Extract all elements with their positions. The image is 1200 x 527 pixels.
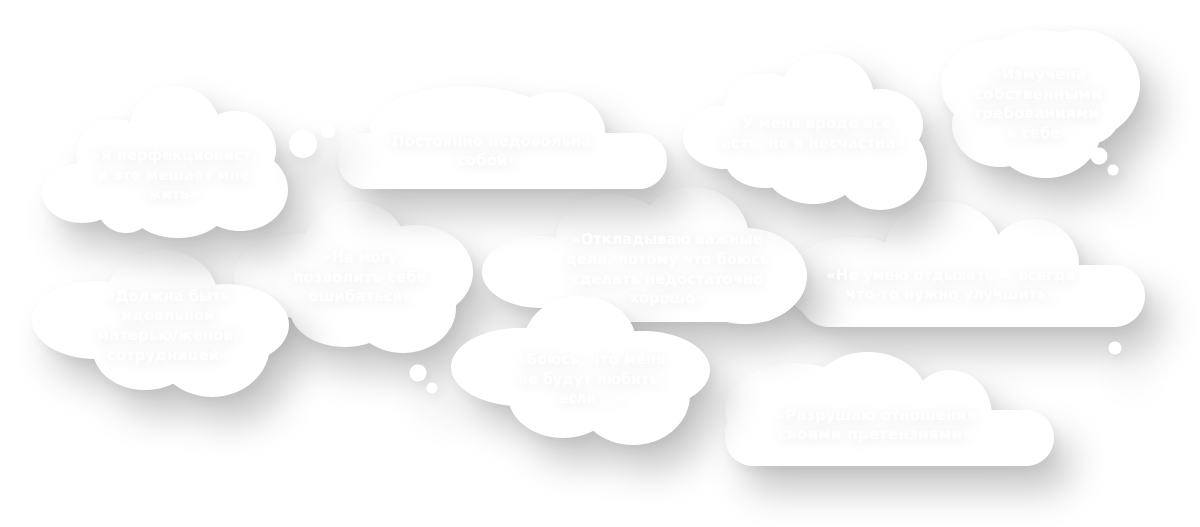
cloud: exhausted: [941, 30, 1140, 178]
text: dissatisfied: [382, 132, 592, 169]
cloud: cannot allow myself mistakes: [234, 201, 473, 353]
text: cannot allow mistakes: «Не могу: [322, 248, 398, 266]
text: afraid: если ...»: [560, 389, 624, 407]
cloud: putting off important things: [482, 187, 807, 324]
cloud: perfectionist: [42, 86, 288, 238]
text: ruin relationships: «Разрушаю отношения: [776, 406, 976, 424]
text: putting off: «Откладываю важные: [572, 230, 762, 248]
text: dissatisfied: «Постоянно недовольна: [382, 132, 592, 150]
thought bubble: rest cloud: [1108, 342, 1122, 354]
text: must be ideal: матерью/женой/: [97, 326, 240, 344]
cloud: must be ideal: [32, 250, 289, 397]
text: dissatisfied: собой»: [457, 151, 517, 169]
text: exhausted: собственными: [974, 85, 1102, 103]
text: unhappy: [721, 114, 905, 152]
text: afraid: «Боюсь, что меня: [516, 350, 666, 368]
text: exhausted: [973, 65, 1102, 142]
text: ruin relationships: [776, 406, 976, 443]
text: unhappy: есть, но я несчастна»: [721, 134, 905, 152]
text: cannot rest: что-то нужно улучшить»: [846, 285, 1056, 303]
text: putting off: [565, 230, 769, 307]
text: cannot allow mistakes: [293, 248, 427, 305]
text: perfectionist: [91, 146, 257, 203]
cloud: constantly dissatisfied: [338, 86, 667, 189]
text: must be ideal: [97, 287, 240, 364]
text: perfectionist: и это мешает мне: [98, 166, 250, 184]
thought bubbles: perfectionist cloud: [289, 124, 335, 158]
thought bubbles: mistakes cloud: [410, 364, 438, 394]
text: afraid: [516, 350, 666, 407]
cloud: cannot rest: [785, 201, 1145, 327]
text: afraid: не будут любить,: [518, 370, 664, 388]
text: cannot allow mistakes: ошибаться»: [308, 287, 412, 305]
text: ruin relationships: своими претензиями»: [778, 425, 972, 443]
text: putting off: дела, потому что боюсь: [565, 250, 769, 268]
text: unhappy: «У меня вроде всё: [732, 114, 892, 132]
text: perfectionist: жить»: [148, 185, 198, 203]
text: perfectionist: «Я перфекционист,: [91, 146, 257, 164]
text: cannot rest: [826, 266, 1076, 303]
text: must be ideal: «Должна быть: [106, 287, 230, 305]
thought bubbles: exhausted cloud: [1090, 148, 1118, 176]
text: cannot allow mistakes: позволить себе: [293, 268, 427, 286]
cloud: unhappy: [683, 53, 927, 210]
text: cannot rest: «Не умею отдыхать — всегда: [826, 266, 1076, 284]
text: exhausted: к себе»: [1007, 124, 1069, 142]
text: putting off: сделать недостаточно: [571, 270, 763, 288]
text: must be ideal: сотрудницей»: [107, 346, 229, 364]
cloud: afraid of not being loved: [451, 296, 710, 445]
text: must be ideal: идеальной: [122, 306, 214, 324]
text: exhausted: «Измучена: [992, 65, 1086, 83]
text: exhausted: требованиями: [973, 104, 1099, 122]
cloud: ruin relationships: [725, 352, 1054, 466]
text: putting off: хорошо»: [630, 289, 704, 307]
